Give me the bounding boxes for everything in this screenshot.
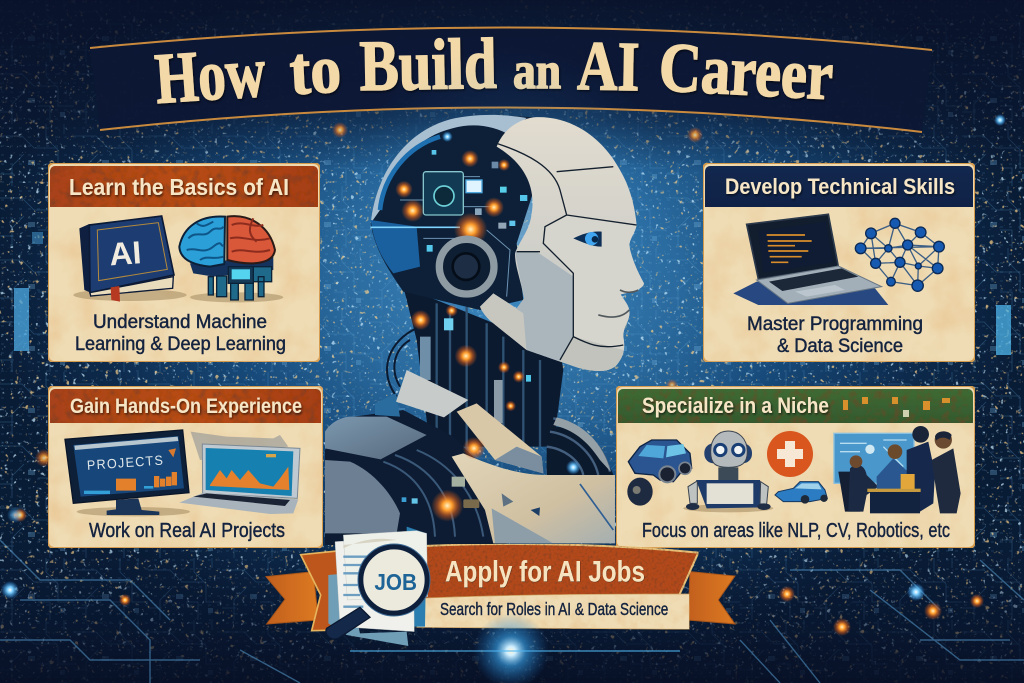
icon: AI book <box>73 216 187 302</box>
panel header <box>705 166 973 207</box>
body text <box>75 312 286 355</box>
icon: magnifying glass: JOB <box>374 569 417 595</box>
title: AI <box>577 28 640 106</box>
panel header <box>50 389 321 423</box>
ear ring <box>439 239 494 294</box>
bottom light flare <box>350 613 680 683</box>
icon: brain and robot <box>179 216 283 302</box>
icon: blue car <box>775 482 828 504</box>
main ribbon <box>423 544 698 600</box>
ribbon tails <box>266 550 735 631</box>
panel header: Specialize in a Niche <box>642 393 829 418</box>
skull circuit area <box>371 115 535 310</box>
body text: Master Programming <box>747 314 923 335</box>
title: to <box>288 30 343 109</box>
panel header: Gain Hands-On Experience <box>70 395 302 418</box>
title <box>153 24 835 119</box>
heading: Apply for AI Jobs <box>445 556 645 589</box>
robot shoulders <box>325 370 615 545</box>
panel: learn the basics of AI <box>48 163 320 362</box>
body text <box>747 314 923 357</box>
subtitle: Search for Roles in AI & Data Science <box>440 599 668 619</box>
icon: job documents <box>328 527 428 646</box>
body text: Work on Real AI Projects <box>89 520 285 542</box>
body text: Focus on areas like NLP, CV, Robotics, etc <box>642 520 950 542</box>
banner: apply for AI jobs <box>266 527 735 646</box>
body text: Learning & Deep Learning <box>75 334 286 355</box>
title banner <box>90 24 932 132</box>
panel header: Develop Technical Skills <box>725 174 955 199</box>
neck electronics <box>387 287 563 447</box>
panel header <box>50 166 318 207</box>
icon: laptop <box>733 214 888 305</box>
icon: magnifying glass <box>326 544 430 639</box>
icon: robot <box>683 431 773 512</box>
icon: AI book: AI <box>108 234 143 272</box>
body text: Understand Machine <box>93 312 267 333</box>
illustration: team meeting <box>834 426 961 513</box>
title: Career <box>657 29 835 115</box>
subtitle strip <box>417 594 689 629</box>
title: Build <box>359 24 497 106</box>
panel: specialize in a niche <box>616 386 975 548</box>
central robot head <box>370 69 644 447</box>
title: How <box>153 31 268 119</box>
icon: analytics laptop <box>179 432 300 514</box>
icon: projects monitor: PROJECTS <box>86 452 165 473</box>
panel: gain hands-on experience <box>48 386 323 548</box>
title: an <box>513 43 561 100</box>
icon: projects monitor <box>65 430 190 516</box>
panel header <box>618 389 973 423</box>
icon: self-driving car <box>627 440 692 506</box>
body text: & Data Science <box>777 336 903 357</box>
panel header: Learn the Basics of AI <box>69 174 289 200</box>
face plating <box>480 117 650 377</box>
icon: medical cross <box>767 431 813 477</box>
panel: develop technical skills <box>703 163 975 362</box>
shoulder plates <box>325 370 615 543</box>
icon: neural network <box>855 218 944 291</box>
